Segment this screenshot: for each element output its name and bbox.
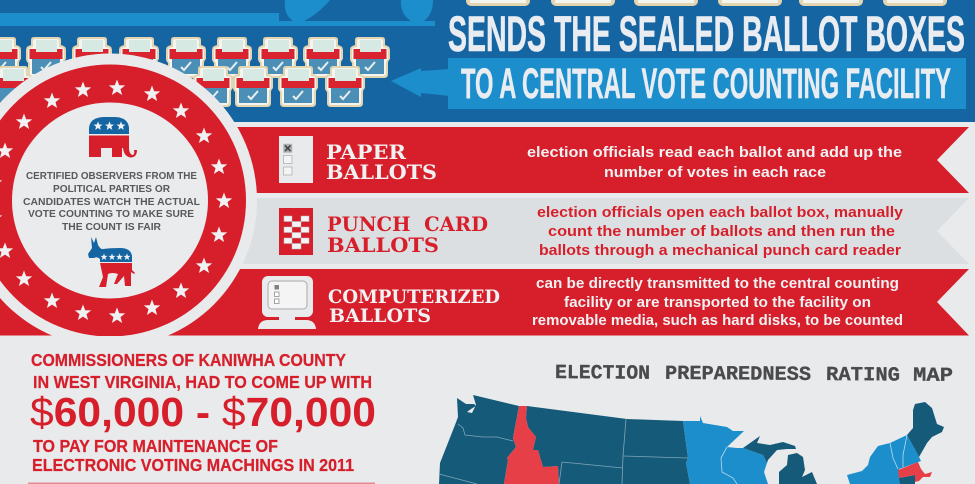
- title: punch card ballots: BALLOTS: [327, 233, 439, 257]
- text block: Kaniwha County cost: [30, 350, 376, 475]
- description: paper ballots: [527, 144, 902, 181]
- description: computerized ballots: facility or are transported to the facility on: [564, 294, 871, 311]
- map: election preparedness: [439, 395, 944, 484]
- arrow pointing to ballot boxes: [391, 68, 450, 97]
- panel: punch card ballots: [0, 198, 969, 264]
- description: punch card ballots: count the number of ballots and then run the: [548, 223, 895, 240]
- text block: Kaniwha County cost: COMMISSIONERS OF KANIWHA COUNTY: [31, 350, 346, 370]
- observers text: CANDIDATES WATCH THE ACTUAL: [23, 196, 201, 208]
- observers text: [23, 170, 201, 233]
- panel: paper ballots: [0, 127, 969, 193]
- heading: election preparedness rating map: RATING: [826, 364, 900, 388]
- panel: blue header: [0, 0, 975, 122]
- title: punch card ballots: PUNCH CARD: [327, 212, 488, 236]
- icon: punch card: [279, 208, 313, 255]
- description: punch card ballots: election officials open each ballot box, manually: [537, 204, 904, 221]
- icon: paper ballot: [279, 136, 313, 183]
- cost figure: $60,000 - $70,000: [30, 389, 376, 435]
- title: paper ballots: PAPER: [326, 140, 406, 164]
- banner: central facility: [448, 58, 966, 109]
- text block: Kaniwha County cost: ELECTRONIC VOTING MACHINGS IN 2011: [32, 455, 354, 475]
- description: computerized ballots: can be directly transmitted to the central counting: [536, 275, 899, 292]
- description: paper ballots: election officials read each ballot and add up the: [527, 144, 902, 161]
- description: paper ballots: number of votes in each race: [604, 164, 826, 181]
- title: computerized ballots: [328, 286, 500, 327]
- ballot boxes: top edge row: [466, 0, 947, 6]
- heading: election preparedness rating map: MAP: [913, 365, 953, 388]
- state: Connecticut: [899, 475, 915, 484]
- strip below bands: [0, 336, 400, 484]
- observers text: VOTE COUNTING TO MAKE SURE: [28, 208, 194, 220]
- icon: democratic donkey: [88, 237, 135, 287]
- ballot boxes: upper row: [0, 37, 390, 78]
- title: paper ballots: [326, 140, 437, 184]
- panel: observers badge: [0, 54, 257, 348]
- state: Massachusetts and Rhode Island: [898, 462, 932, 482]
- description: computerized ballots: removable media, such as hard disks, to be counted: [532, 312, 903, 329]
- observers text: POLITICAL PARTIES OR: [53, 183, 170, 195]
- heading: election preparedness rating map: PREPAREDNESS: [665, 363, 811, 387]
- text block: Kaniwha County cost: IN WEST VIRGINIA, HAD TO COME UP WITH: [33, 372, 372, 392]
- observers text: CERTIFIED OBSERVERS FROM THE: [26, 170, 197, 182]
- state: Idaho: [504, 406, 559, 484]
- heading: election preparedness rating map: ELECTION: [555, 362, 650, 386]
- description: punch card ballots: ballots through a mechanical punch card reader: [539, 242, 901, 259]
- observers text: THE COUNT IS FAIR: [62, 221, 161, 233]
- states: Minnesota and Wisconsin: [683, 416, 768, 484]
- heading: election preparedness rating map: [555, 362, 953, 388]
- icon: republican elephant: [89, 117, 137, 158]
- icon: computer: [258, 276, 316, 329]
- description: punch card ballots: [537, 204, 904, 259]
- states: northwest dark: [439, 395, 519, 484]
- ballot boxes: lower row: [0, 66, 365, 107]
- state: Michigan: [743, 436, 817, 484]
- conveyor shelf: [0, 0, 435, 26]
- panel: computerized ballots: [0, 269, 969, 336]
- text block: Kaniwha County cost: TO PAY FOR MAINTENANCE OF: [33, 436, 278, 456]
- states: northern plains dark: [526, 406, 690, 484]
- state lines: west: [439, 419, 688, 484]
- description: computerized ballots: [532, 275, 903, 329]
- title: punch card ballots: [327, 212, 488, 257]
- states: New York, Vermont, New Hampshire: [847, 435, 921, 484]
- badge stars: [0, 80, 232, 323]
- title: computerized ballots: BALLOTS: [329, 305, 431, 327]
- title: computerized ballots: COMPUTERIZED: [328, 286, 500, 308]
- title: paper ballots: BALLOTS: [326, 160, 437, 184]
- state: Maine: [907, 402, 944, 457]
